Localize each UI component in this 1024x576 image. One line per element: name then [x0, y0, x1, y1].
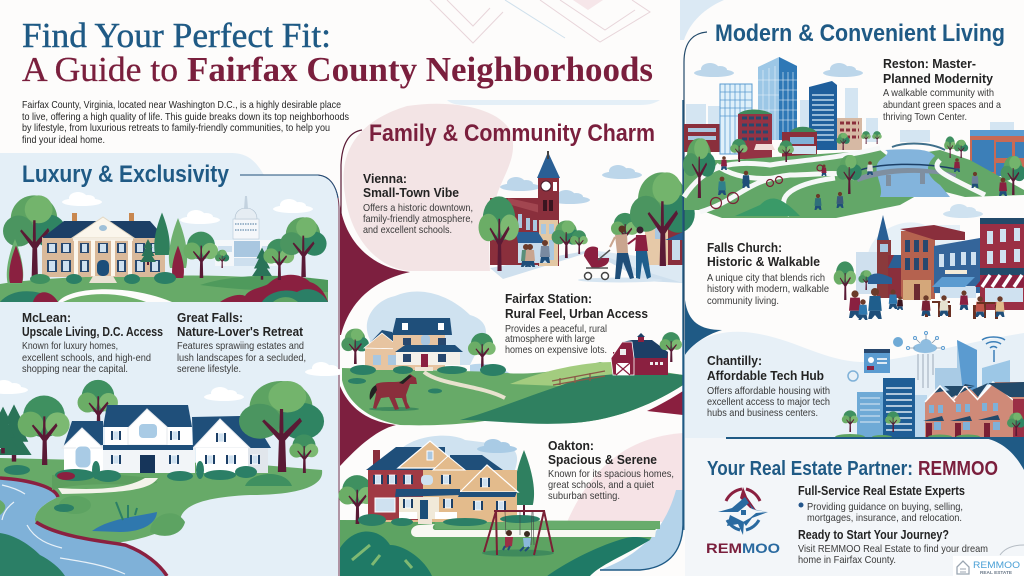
text block: great falls: Great Falls: [177, 311, 243, 325]
text block: fairfax station: Rural Feel, Urban Access [505, 307, 648, 321]
illustration: chantilly tech hub [835, 332, 1024, 440]
text block: chantilly: Offers affordable housing with [707, 385, 830, 397]
text block: reston: abundant green spaces and a [883, 99, 1001, 111]
text block: mclean: excellent schools, and high-end [22, 352, 151, 364]
logo wordmark: REM [706, 540, 742, 556]
illustration: colonial mansion and capitol [0, 192, 328, 302]
text block: great falls [177, 311, 306, 375]
text block: ready to start: home in Fairfax County. [798, 554, 896, 566]
icon: mansion [42, 213, 165, 283]
header line [684, 32, 707, 340]
text block: mclean: Known for luxury homes, [22, 340, 118, 352]
text block: great falls: Nature-Lover's Retreat [177, 325, 304, 339]
icon: shopfronts [900, 218, 1024, 310]
text block: vienna: and excellent schools. [363, 224, 452, 236]
panel: chantilly background wave [685, 332, 1024, 438]
text block: oakton: suburban setting. [548, 490, 620, 502]
text block: chantilly: hubs and business centers. [707, 407, 818, 419]
text block: vienna: family-friendly atmosphere, [363, 213, 473, 225]
text block: mclean: Upscale Living, D.C. Access [22, 325, 163, 339]
text block: full service: mortgages, insurance, and relocation. [807, 512, 962, 524]
pink blob [344, 104, 513, 271]
icon: church [877, 215, 902, 298]
watermark: remmoo real estate: REMMOO [973, 560, 1020, 571]
text block: reston: Reston: Master- [883, 57, 976, 71]
illustration: fairfax station farm [341, 291, 683, 425]
icon: brick building and clock tower [490, 151, 560, 266]
text block: vienna: Offers a historic downtown, [363, 202, 473, 214]
illustration: vienna town scene [479, 151, 695, 283]
text block: falls church: Falls Church: [707, 241, 782, 255]
text block: chantilly: Affordable Tech Hub [707, 369, 824, 383]
illustration: reston skyline and park [683, 57, 1024, 218]
icon: blue roof house [364, 318, 463, 371]
text block: ready to start: Visit REMMOO Real Estate to find your dream [798, 543, 988, 555]
text block: mclean: McLean: [22, 311, 71, 325]
pink blob: oakton [567, 433, 683, 522]
heading: family: Family & Community Charm [369, 120, 655, 147]
icon: fence [552, 371, 605, 385]
heading: partner: REMMOO [918, 457, 998, 480]
logo: remmoo [706, 487, 780, 556]
icon: wifi [982, 337, 1005, 362]
text block: mclean: shopping near the capital. [22, 363, 128, 375]
panel: modern and convenient living [680, 0, 1024, 440]
title: Fairfax County Neighborhoods [187, 50, 653, 89]
text block: fairfax station: atmosphere with large [505, 333, 595, 345]
text block: full service: Providing guidance on buying, selling, [807, 501, 963, 513]
divider line: center to right [600, 100, 683, 570]
text block: vienna: Small-Town Vibe [363, 186, 459, 200]
watermark: remmoo real estate: REAL ESTATE [980, 570, 1012, 575]
text block: vienna: Vienna: [363, 172, 407, 186]
intro text block: by lifestyle, from luxurious retreats to family-friendly communities, to help you [22, 122, 330, 134]
heading: partner: Your Real Estate Partner: [707, 457, 913, 480]
text block: oakton: Known for its spacious homes, [548, 468, 674, 480]
icon: horse [369, 374, 419, 411]
text block: fairfax station: Provides a peaceful, rural [505, 323, 607, 335]
icon: townhouses [923, 382, 1024, 438]
watermark: remmoo real estate [953, 556, 1024, 576]
icon: red barn [611, 333, 668, 375]
text block: great falls: serene lifestyle. [177, 363, 241, 375]
text block: oakton: great schools, and a quiet [548, 479, 654, 491]
illustration: falls church main street [834, 204, 1024, 320]
light blue header shape [447, 100, 660, 105]
icon: farmhouse [62, 405, 271, 473]
text block: fairfax station: homes on expensive lots. [505, 344, 607, 356]
intro text block: find your ideal home. [22, 134, 105, 146]
text block: fairfax station: Fairfax Station: [505, 292, 592, 306]
title: Find Your Perfect Fit: [22, 16, 331, 55]
panel: family and community charm [338, 100, 695, 576]
text block: chantilly: Chantilly: [707, 354, 762, 368]
text block: falls church: Historic & Walkable [707, 255, 820, 269]
icon: couple with stroller [578, 226, 662, 282]
intro text block: Fairfax County, Virginia, located near Washington D.C., is a highly desirable place [22, 99, 341, 111]
white walking paths [684, 148, 985, 215]
text block: reston: Planned Modernity [883, 72, 993, 86]
text block: fairfax station [505, 292, 648, 356]
title: A Guide to [22, 50, 178, 89]
maroon ribbon [340, 130, 683, 466]
text block: ready to start: Ready to Start Your Journey? [798, 528, 949, 542]
river and bridges [856, 144, 956, 197]
light blue corner ribbon [600, 490, 683, 570]
text block: falls church: A unique city that blends rich [707, 272, 825, 284]
text block: reston: A walkable community with [883, 87, 994, 99]
light blue corner [680, 0, 724, 40]
decorative top lines [430, 0, 650, 43]
text block: chantilly [707, 354, 830, 419]
text block: vienna [363, 172, 473, 236]
text block: oakton: Spacious & Serene [548, 453, 657, 467]
panel: luxury and exclusivity [0, 153, 345, 576]
heading: luxury: Luxury & Exclusivity [22, 161, 230, 188]
text block: falls church: community living. [707, 295, 779, 307]
text block: ready to start [798, 528, 988, 566]
text block: reston: thriving Town Center. [883, 111, 967, 123]
illustration: oakton house and swing [338, 436, 660, 576]
text block: oakton [548, 439, 674, 502]
intro text block [22, 99, 349, 146]
title [22, 16, 653, 89]
icon: cloud network [848, 332, 944, 388]
dark blue ribbon under falls church [685, 300, 722, 355]
panel: your real estate partner [684, 340, 1024, 576]
illustration: farmhouse, lawn and river [0, 362, 345, 576]
icon: capitol [215, 196, 277, 266]
logo wordmark [706, 540, 780, 556]
text block: oakton: Oakton: [548, 439, 594, 453]
text block: falls church [707, 241, 829, 307]
text block: falls church: history with modern, walkable [707, 283, 829, 295]
intro text block: to live, offering a high quality of life. This guide breaks down its top neighborhoods [22, 111, 349, 123]
logo wordmark: MOO [742, 540, 780, 556]
text block: chantilly: excellent access to major tech [707, 396, 830, 408]
text block: reston [883, 57, 1001, 123]
icon: oakton house [366, 441, 518, 524]
text block: full service: Full-Service Real Estate Experts [798, 484, 965, 498]
text block: full service [798, 484, 965, 524]
foreground bushes [340, 532, 650, 576]
foreground bushes [0, 275, 328, 302]
icon: cafe tables [922, 295, 1004, 319]
icon: swing set [482, 511, 554, 556]
icon: towers [720, 57, 1024, 176]
icon: office towers [857, 378, 927, 438]
text block: great falls: lush landscapes for a secluded, [177, 352, 306, 364]
text block: mclean [22, 311, 163, 375]
text block: great falls: Features sprawiing estates and [177, 340, 304, 352]
